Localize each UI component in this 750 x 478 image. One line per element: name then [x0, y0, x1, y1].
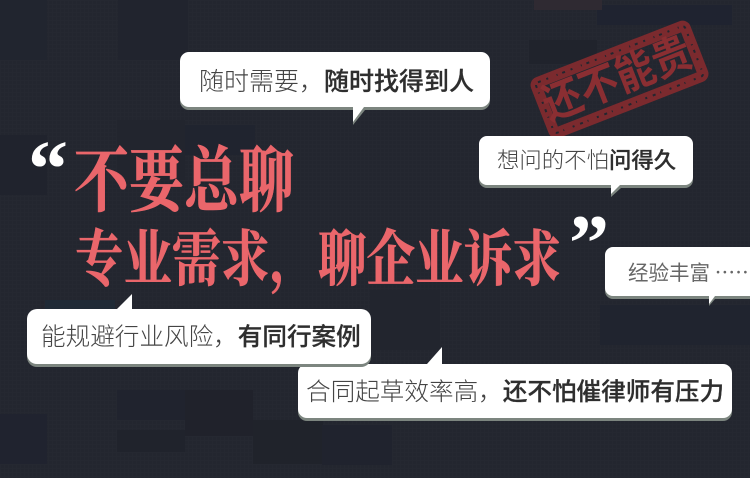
bubble text: 能规避行业风险，有同行案例: [41, 323, 361, 351]
opening quote mark: “: [28, 126, 68, 214]
bubble text: 随时需要，随时找得到人: [199, 68, 474, 96]
title line 1: 不要总聊: [74, 142, 294, 221]
bubble text: 想问的不怕问得久: [497, 148, 676, 173]
bubble text: 合同起草效率高，还不怕催律师有压力: [306, 378, 724, 406]
speech bubble: bottom left: [27, 294, 371, 367]
speech bubble: right middle: [605, 247, 750, 306]
stamp frame: [535, 25, 704, 134]
speech bubble: top: [180, 52, 490, 125]
stamp: [535, 25, 704, 134]
stamp texture: [535, 25, 704, 134]
speech bubble: bottom right: [298, 347, 732, 421]
closing quote mark: ”: [569, 200, 609, 288]
title line 2: 专业需求，聊企业诉求: [75, 226, 561, 295]
stamp text: 还不能贵: [536, 28, 698, 129]
speech bubble: right upper: [479, 136, 693, 197]
